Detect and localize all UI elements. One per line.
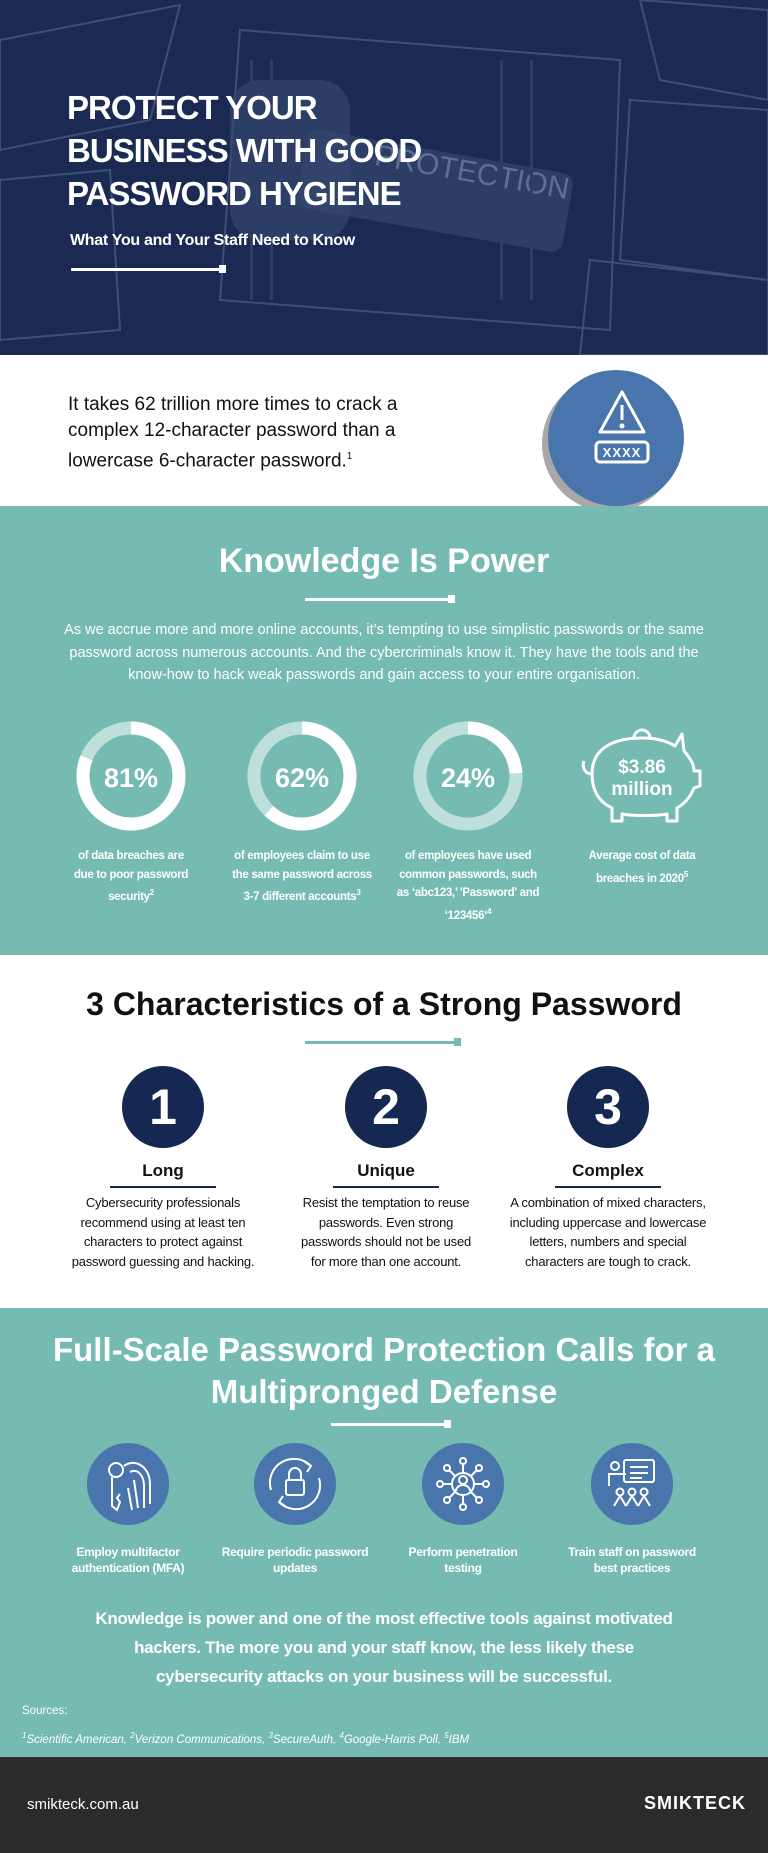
characteristic: complex: including uppercase and lowercase xyxy=(510,1214,706,1230)
characteristic: long: characters to protect against xyxy=(84,1234,242,1249)
intro paragraph: know-how to hack weak passwords and gain access to your entire organisation. xyxy=(128,667,640,683)
characteristic: long: 1 xyxy=(149,1079,177,1135)
logo: SMIKTECK xyxy=(644,1793,746,1813)
characteristic: unique: passwords. Even strong xyxy=(319,1214,453,1230)
heading: Knowledge Is Power xyxy=(219,542,549,580)
intro paragraph: password across numerous accounts. And the cybercriminals know it. They have the tools and the xyxy=(69,644,699,660)
characteristic: unique: Resist the temptation to reuse xyxy=(303,1195,469,1210)
characteristic: unique xyxy=(301,1066,471,1268)
panel: knowledge is power: breaches in 20205 xyxy=(596,870,688,884)
panel: multipronged defense: Train staff on password xyxy=(568,1545,696,1559)
icon labels xyxy=(72,1545,184,1575)
panel: multipronged defense xyxy=(0,1308,768,1757)
heading: Multipronged Defense xyxy=(211,1373,557,1410)
panel: multipronged defense: 1Scientific American, 2Verizon Communications, 3SecureAuth, 4Google-Harris Poll, 5IBM xyxy=(22,1731,469,1746)
panel: knowledge is power: ‘123456‘4 xyxy=(445,906,491,921)
characteristic: unique: Unique xyxy=(357,1161,415,1180)
panel: multipronged defense: Require periodic password xyxy=(222,1545,368,1559)
donut charts: $3.86 xyxy=(618,757,666,778)
closing paragraph xyxy=(95,1609,673,1686)
characteristic: complex: 3 xyxy=(594,1079,622,1135)
panel: knowledge is power: of employees have used xyxy=(405,850,531,862)
closing paragraph: Knowledge is power and one of the most effective tools against motivated xyxy=(95,1609,673,1628)
title underline xyxy=(71,268,226,271)
donut charts xyxy=(76,722,702,830)
characteristic: unique: for more than one account. xyxy=(311,1254,461,1268)
panel: knowledge is power: as ‘abc123,’ 'Password' and xyxy=(397,887,539,899)
characteristic: unique: 2 xyxy=(372,1079,400,1135)
stat labels xyxy=(74,850,188,903)
characteristic: complex xyxy=(510,1066,706,1268)
title: PROTECT YOUR xyxy=(67,89,317,126)
stat labels: of data breaches are xyxy=(78,850,184,862)
stat text: It takes 62 trillion more times to crack a complex 12-character password than a lowercase 6-character password.1 xyxy=(68,394,397,471)
closing paragraph: hackers. The more you and your staff know, the less likely these xyxy=(134,1638,634,1657)
characteristic: long: password guessing and hacking. xyxy=(72,1254,254,1268)
icons xyxy=(87,1443,673,1525)
panel: knowledge is power xyxy=(0,506,768,955)
icon: warning password: XXXX xyxy=(603,445,641,460)
panel: multipronged defense: updates xyxy=(273,1561,317,1575)
icon: training xyxy=(591,1443,673,1525)
panel: knowledge is power: common passwords, such xyxy=(399,868,537,880)
title: PASSWORD HYGIENE xyxy=(67,175,401,212)
donut charts: 81% xyxy=(104,763,158,793)
panel: multipronged defense: best practices xyxy=(594,1561,670,1575)
header banner xyxy=(0,0,768,355)
donut charts: 62% xyxy=(275,763,329,793)
donut charts: 24% xyxy=(441,763,495,793)
subtitle: What You and Your Staff Need to Know xyxy=(70,232,355,249)
icon: network person xyxy=(422,1443,504,1525)
panel: multipronged defense: testing xyxy=(444,1561,482,1575)
icon: fingerprint key xyxy=(87,1443,169,1525)
characteristic: long: Long xyxy=(142,1161,184,1180)
heading xyxy=(53,1331,716,1410)
stat labels: security2 xyxy=(108,888,154,903)
heading underline xyxy=(305,1041,461,1044)
panel: knowledge is power: of employees claim to use xyxy=(234,850,370,862)
title: BUSINESS WITH GOOD xyxy=(67,132,421,169)
heading underline xyxy=(331,1423,451,1426)
intro paragraph xyxy=(64,622,704,683)
icon: warning password xyxy=(542,370,684,506)
panel: knowledge is power: 3-7 different accounts3 xyxy=(243,888,361,903)
characteristic: complex: Complex xyxy=(572,1161,644,1180)
panel: knowledge is power: Average cost of data xyxy=(589,850,695,862)
website: smikteck.com.au xyxy=(27,1796,139,1813)
heading: Full-Scale Password Protection Calls for a xyxy=(53,1331,715,1368)
header banner: PROTECTION xyxy=(372,139,572,206)
characteristic: complex: letters, numbers and special xyxy=(530,1234,686,1249)
characteristic: long: Cybersecurity professionals xyxy=(86,1195,240,1210)
icon: piggy bank xyxy=(583,730,700,821)
intro paragraph: As we accrue more and more online accounts, it’s tempting to use simplistic passwords or the same xyxy=(64,622,704,638)
closing paragraph: cybersecurity attacks on your business will be successful. xyxy=(156,1667,612,1686)
title xyxy=(67,89,421,212)
panel: knowledge is power: the same password across xyxy=(232,868,372,880)
footer xyxy=(0,1757,768,1853)
characteristic: complex: characters are tough to crack. xyxy=(525,1254,691,1268)
panel: multipronged defense: Perform penetration xyxy=(408,1545,518,1559)
characteristic: unique: passwords should not be used xyxy=(301,1234,471,1249)
icon labels: Employ multifactor xyxy=(76,1545,180,1559)
icon: lock refresh xyxy=(254,1443,336,1525)
heading: 3 characteristics: 3 Characteristics of a Strong Password xyxy=(86,986,682,1022)
heading underline xyxy=(305,598,455,601)
icon labels: authentication (MFA) xyxy=(72,1561,184,1575)
donut charts: million xyxy=(611,779,673,800)
characteristic: complex: A combination of mixed characters, xyxy=(510,1195,706,1210)
stat labels: due to poor password xyxy=(74,868,188,880)
sources: Sources: xyxy=(22,1705,67,1717)
characteristic: long: recommend using at least ten xyxy=(81,1214,245,1230)
characteristic: long xyxy=(72,1066,254,1268)
